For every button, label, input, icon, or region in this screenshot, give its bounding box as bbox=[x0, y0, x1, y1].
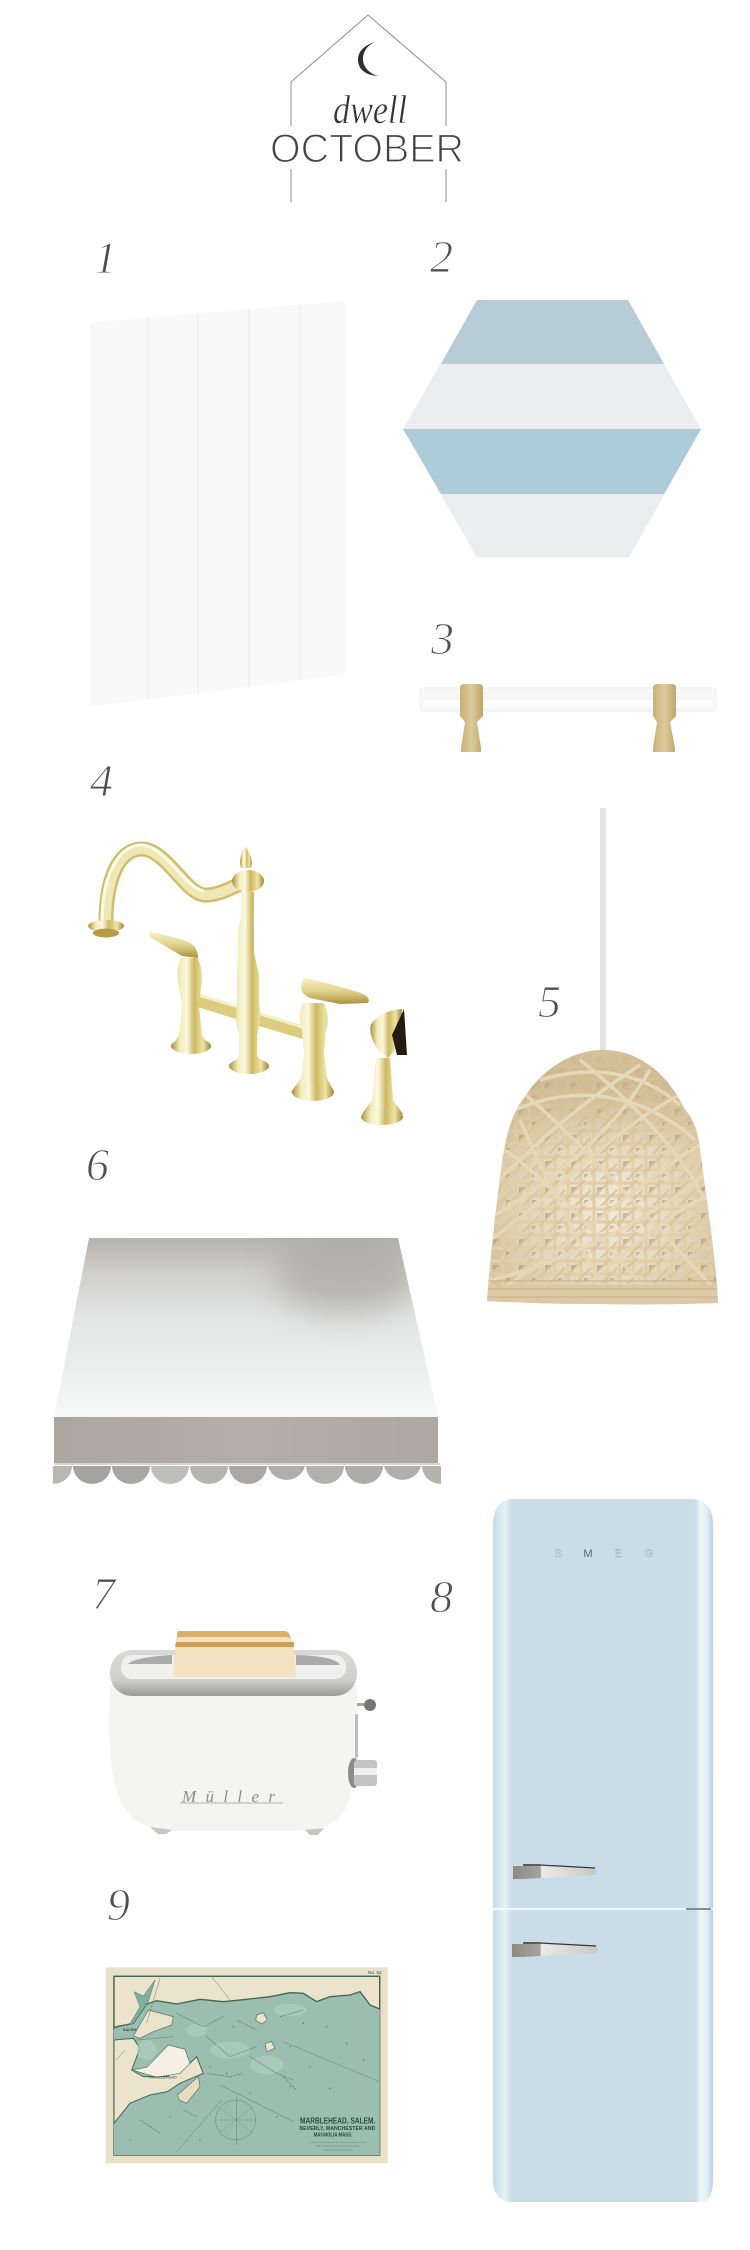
harbour inlet bbox=[129, 1980, 155, 2025]
heading: OCTOBER: OCTOBER bbox=[270, 127, 464, 171]
soundings bbox=[129, 2023, 364, 2141]
panel: stainless range hood bbox=[53, 1235, 441, 1484]
item number 5: 5 bbox=[538, 976, 561, 1027]
fridge body bbox=[493, 1499, 713, 2202]
bridge bbox=[191, 998, 309, 1034]
compass rose bbox=[216, 2100, 256, 2140]
chart lines bbox=[116, 1977, 379, 2152]
chart title: MAGNOLIA MASS. bbox=[314, 2133, 353, 2139]
chart title bbox=[299, 2117, 375, 2139]
left shore bbox=[114, 2038, 203, 2123]
SMEG logo bbox=[554, 1548, 653, 1560]
item number 2: 2 bbox=[430, 231, 453, 282]
panel: white beadboard bbox=[90, 301, 346, 706]
panel: woven pendant lamp bbox=[480, 808, 725, 1310]
SMEG logo: G bbox=[645, 1548, 653, 1560]
chrome rim bbox=[110, 1650, 357, 1696]
scalloped trim bbox=[53, 1466, 441, 1484]
woven shade bbox=[480, 1045, 725, 1310]
centre column bbox=[229, 892, 269, 1074]
item number 8: 8 bbox=[430, 1571, 453, 1622]
panel: striped hexagon tile bbox=[403, 300, 701, 558]
place labels: MARBLEHEAD bbox=[149, 2074, 177, 2079]
place labels: SALEM bbox=[123, 2027, 137, 2032]
side dial bbox=[348, 1758, 377, 1788]
right valve bbox=[301, 978, 369, 1004]
toaster body bbox=[109, 1685, 357, 1831]
item number 7: 7 bbox=[92, 1568, 117, 1619]
upper handle bbox=[513, 1864, 596, 1879]
door gap bbox=[492, 1908, 714, 1910]
Salem neck bbox=[133, 2010, 173, 2038]
toast slices bbox=[177, 1631, 291, 1650]
panel: pastel blue retro fridge bbox=[492, 1499, 714, 2202]
place labels bbox=[123, 1970, 382, 2079]
paper border bbox=[106, 1967, 388, 2163]
panel: nautical chart of Marblehead bbox=[106, 1967, 388, 2163]
item number 6: 6 bbox=[86, 1139, 109, 1190]
side lever bbox=[355, 1699, 376, 1758]
SMEG logo: E bbox=[614, 1548, 622, 1560]
chart water bbox=[114, 1976, 380, 2156]
item number 4: 4 bbox=[90, 755, 113, 806]
panel: acrylic and brass pull bbox=[420, 684, 716, 752]
chart title: BEVERLY, MANCHESTER AND bbox=[299, 2126, 375, 2132]
SMEG logo: M bbox=[583, 1548, 593, 1560]
header logo bbox=[270, 15, 464, 202]
left bracket bbox=[460, 684, 483, 752]
panel: brass bridge faucet bbox=[88, 845, 407, 1125]
Marblehead Neck bbox=[177, 2077, 200, 2103]
right bracket bbox=[653, 684, 676, 752]
shoal patches bbox=[137, 2004, 307, 2074]
mainland bbox=[114, 1976, 380, 2028]
panel: white retro toaster bbox=[109, 1631, 377, 1835]
spout bbox=[106, 849, 248, 922]
icon: crescent moon bbox=[358, 42, 378, 76]
lamp cord bbox=[600, 808, 606, 1051]
hood front band bbox=[54, 1417, 438, 1465]
lower handle bbox=[512, 1942, 598, 1957]
fine print lines bbox=[310, 2143, 367, 2150]
script title: dwell: dwell bbox=[333, 87, 407, 132]
SMEG logo: S bbox=[554, 1548, 562, 1560]
hood sloped top bbox=[54, 1238, 438, 1417]
brand script: Müller bbox=[181, 1787, 283, 1806]
house outline bbox=[291, 15, 446, 202]
sprayer bbox=[370, 1009, 402, 1058]
item number 3: 3 bbox=[430, 613, 454, 664]
item number 9: 9 bbox=[107, 1879, 130, 1930]
Marblehead land bbox=[132, 2045, 190, 2077]
item number 1: 1 bbox=[94, 232, 117, 283]
place labels: No. 52 bbox=[368, 1970, 382, 1975]
left valve bbox=[150, 932, 198, 958]
islands bbox=[256, 2013, 267, 2024]
chart title: MARBLEHEAD, SALEM. bbox=[300, 2117, 375, 2126]
